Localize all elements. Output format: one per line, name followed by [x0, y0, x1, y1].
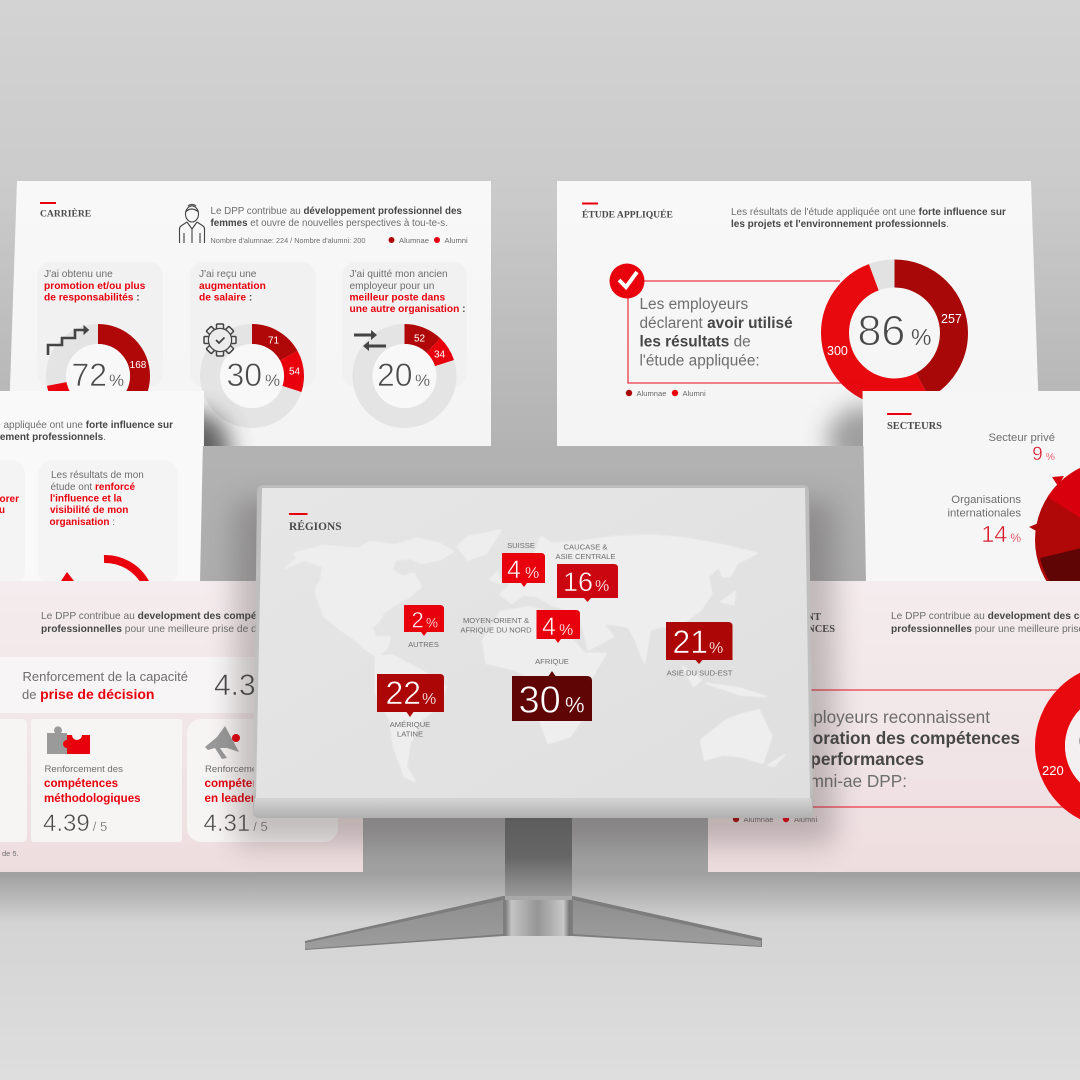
score label: prise de décision	[40, 686, 154, 702]
value: 72: %	[109, 371, 124, 390]
box	[502, 553, 545, 587]
card text: compétences	[204, 777, 279, 790]
card text: :	[133, 292, 140, 304]
legend: carrière: Alumnae	[399, 236, 429, 245]
stand neck	[505, 816, 572, 898]
marker: suisse	[502, 541, 545, 587]
monitor shadow	[235, 500, 835, 845]
icon: check badge	[610, 264, 644, 298]
panel: influence (left, partly hidden)	[0, 391, 204, 585]
score label: Renforcement de la capacité	[22, 669, 188, 684]
value: 2	[412, 608, 424, 632]
intro text: les projets et l'environnement professionnels	[731, 219, 947, 230]
value: 86: 86	[858, 307, 905, 355]
donut: 72 percent	[56, 334, 140, 418]
intro text: Le DPP contribue au	[891, 611, 988, 622]
value: 14: 14%	[981, 521, 1021, 547]
card text: visibilité de mon	[50, 505, 128, 516]
donut: 30 percent	[210, 334, 294, 418]
score bar: prise de décision	[0, 657, 363, 713]
card text: Renforcement des	[205, 764, 284, 775]
panel: carrière	[10, 181, 491, 446]
callout text bold lines: et des performances	[756, 749, 924, 769]
card text: promotion et/ou plus	[44, 281, 146, 292]
intro text line two: femmes et ouvre de nouvelles perspectives à tou-te-s.	[210, 218, 448, 229]
footnote: de 5.	[2, 849, 19, 858]
box	[666, 622, 732, 664]
card text: :	[459, 304, 466, 315]
marker: afrique	[512, 657, 592, 722]
cast shadow on étude panel	[814, 394, 863, 446]
value: 54: 54	[289, 366, 300, 378]
world map	[285, 530, 784, 782]
card text: J'ai obtenu une	[44, 269, 113, 280]
value: %	[525, 565, 539, 582]
value: %	[422, 691, 436, 708]
callout text: l'étude appliquée:	[640, 352, 760, 370]
intro text: .	[946, 219, 949, 230]
label: AFRIQUE	[535, 657, 569, 666]
card text: augmentation	[199, 281, 266, 292]
pie chart	[1029, 460, 1080, 620]
legend: étude	[626, 389, 706, 398]
card: influence	[38, 460, 178, 585]
card text: renforcé	[95, 482, 135, 493]
marker: moyen-orient	[460, 610, 580, 643]
callout text: Les employeurs reconnaissent	[757, 707, 990, 727]
heading: secteurs: SECTEURS	[887, 421, 942, 432]
card text: en leadership	[204, 792, 279, 805]
value: 220: 220	[1042, 763, 1064, 778]
card: promotion	[37, 262, 163, 418]
heading: régions	[289, 513, 342, 533]
label: organisations internationales: internationales	[948, 508, 1021, 520]
label: ASIE CENTRALE	[556, 552, 615, 561]
callout text: Les employeurs	[640, 296, 748, 313]
legend: Alumnae	[744, 815, 773, 824]
legend: étude: Alumnae	[636, 389, 666, 398]
value: 4	[542, 613, 556, 641]
intro text: Les résultats de l'étude appliquée ont une	[731, 207, 919, 218]
marker: asie du sud-est	[666, 622, 733, 678]
panel: compétences (left, pink)	[0, 581, 363, 872]
intro text: forte influence sur	[919, 207, 1006, 218]
intro text: professionnelles	[41, 624, 122, 635]
donut: 20 percent	[362, 334, 446, 418]
value: %	[426, 616, 438, 630]
legend: carrière	[388, 236, 468, 245]
value: %	[709, 640, 723, 657]
callout text: avoir utilisé	[707, 315, 793, 332]
box	[377, 674, 444, 717]
legend: carrière: Alumni	[444, 236, 468, 245]
intro text: carrière: Le DPP contribue au développement professionnel des	[210, 206, 462, 217]
legend: Alumni	[794, 815, 818, 824]
value: 20: %	[415, 371, 430, 390]
callout text: les résultats	[640, 334, 729, 350]
icon: puzzle	[47, 726, 90, 754]
monitor stand	[305, 816, 762, 950]
panel: étude appliquée	[557, 181, 1040, 474]
value: 4	[507, 556, 521, 584]
icon: stairs	[48, 326, 88, 355]
intro text: development des compétences	[138, 611, 289, 622]
icon fragment	[61, 572, 74, 581]
icon: woman	[180, 204, 204, 243]
outlined callout box	[628, 281, 846, 383]
value: 168: 168	[130, 360, 147, 371]
card text: organisation	[50, 517, 110, 528]
marker: caucase	[556, 542, 618, 602]
box	[536, 610, 580, 643]
card text: :	[110, 517, 115, 528]
card text: l'influence et la	[50, 494, 122, 504]
card text: de salaire	[199, 292, 246, 304]
marker: autres	[404, 605, 444, 649]
card text: étude ont	[50, 482, 95, 493]
value: 30: 30	[226, 357, 262, 393]
label: secteur privé: Secteur privé	[988, 432, 1055, 444]
callout text bold lines: l'amélioration des compétences	[760, 728, 1020, 748]
screen	[256, 488, 810, 798]
value: 16	[563, 567, 593, 597]
value: 20: 20	[377, 357, 413, 393]
label: AMÉRIQUE	[390, 720, 430, 729]
panel: secteurs	[862, 391, 1080, 620]
card: partial left	[0, 460, 25, 585]
stand base	[305, 896, 762, 950]
card: compétences en leadership	[187, 719, 338, 842]
donut arc fragment	[104, 559, 146, 584]
sample size note: Nombre d'alumnae: 224 / Nombre d'alumni: 200	[210, 236, 365, 245]
card text: compétences	[44, 777, 118, 790]
value: 4.31: 4.31/ 5	[204, 810, 268, 837]
value: 4.39: 4.39/ 5	[43, 810, 107, 837]
monitor bezel	[253, 485, 813, 818]
icon: gear with check	[204, 324, 236, 356]
monitor	[253, 485, 813, 818]
card text: J'ai quitté mon ancien	[350, 269, 448, 280]
card text: Renforcement des	[44, 764, 123, 775]
value: %	[559, 622, 573, 639]
label: LATINE	[397, 730, 423, 738]
heading: carrière: CARRIÈRE	[40, 208, 91, 220]
box	[512, 671, 592, 721]
heading: développement de compétences: DE COMPÉTENCES	[738, 623, 835, 635]
callout text closing line: des alumni-ae DPP:	[754, 771, 907, 791]
card text: employeur pour un	[350, 281, 434, 292]
value: 30	[518, 680, 561, 722]
callout text: déclarent	[640, 315, 707, 332]
monitor chin	[253, 798, 813, 818]
intro text: pour une meilleure prise de décision	[122, 624, 288, 635]
value: %	[565, 692, 585, 718]
value: %	[595, 578, 609, 595]
value: 71: 71	[268, 336, 279, 346]
value: 21	[672, 624, 708, 660]
card text: meilleur poste dans	[350, 292, 446, 304]
value: 22	[386, 675, 421, 711]
icon: megaphone	[205, 726, 240, 759]
heading: secteurs	[887, 413, 942, 432]
card: meilleur poste	[342, 262, 467, 418]
card text: :	[246, 292, 252, 304]
value: 257: 257	[941, 312, 962, 326]
box	[404, 605, 444, 636]
card: compétences méthodologiques	[31, 719, 182, 842]
label: MOYEN-ORIENT &	[463, 616, 529, 625]
cast shadow on carrière panel	[204, 397, 246, 446]
heading: régions: RÉGIONS	[289, 521, 342, 533]
card: partial left	[0, 719, 27, 842]
label: SUISSE	[507, 541, 535, 550]
card text: J'ai reçu une	[199, 269, 257, 280]
donut: partial	[1050, 679, 1080, 813]
value: 34: 34	[434, 350, 445, 360]
value: 9: 9 %	[1032, 444, 1055, 465]
callout lines	[780, 690, 1066, 807]
label: organisations internationales: Organisations	[951, 494, 1021, 506]
heading: étude appliquée	[582, 202, 673, 220]
heading: développement de compétences: DÉVELOPPEMENT	[726, 611, 821, 623]
callout text: de	[729, 334, 751, 350]
label: AUTRES	[408, 640, 439, 649]
intro text: .	[103, 432, 106, 443]
label: CAUCASE &	[564, 542, 607, 552]
panel: compétences (right, pink)	[708, 581, 1080, 872]
value: 30: %	[265, 371, 280, 390]
marker: amérique latine	[377, 674, 444, 738]
value: 86: %	[911, 324, 931, 350]
value: 72: 72	[72, 357, 107, 393]
legend: étude: Alumni	[682, 389, 706, 398]
box	[557, 564, 618, 602]
label: ASIE DU SUD-EST	[667, 668, 733, 678]
card text: méthodologiques	[44, 792, 141, 805]
score value: 4.34	[214, 669, 272, 702]
card text: de responsabilités	[44, 292, 134, 304]
value: 300: 300	[827, 344, 848, 358]
card text: une autre organisation	[350, 304, 459, 315]
score label: de	[22, 687, 40, 702]
value: 52: 52	[414, 334, 425, 344]
card: salaire	[190, 262, 316, 418]
legend	[733, 815, 818, 824]
heading: étude appliquée: ÉTUDE APPLIQUÉE	[582, 208, 673, 220]
intro text: Le DPP contribue au	[41, 611, 138, 622]
icon: swap arrows	[354, 330, 386, 351]
donut: 86 percent	[835, 274, 954, 392]
heading: carrière	[40, 202, 91, 220]
intro text: professionnelles	[891, 624, 972, 635]
label: AFRIQUE DU NORD	[460, 626, 532, 634]
card text: Les résultats de mon	[51, 470, 144, 481]
